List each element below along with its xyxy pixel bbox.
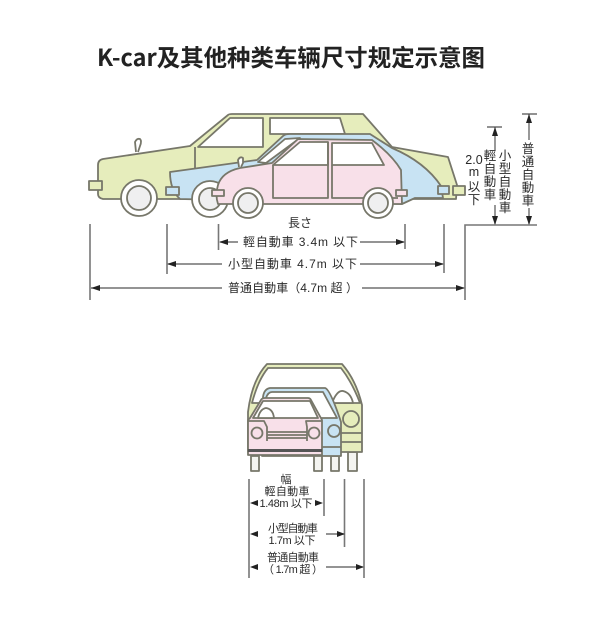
dimension: kei car width: 1.48m 以下 (260, 498, 312, 510)
dimension: kei car height: 動 (484, 175, 496, 189)
dimension: standard car height: 通 (522, 155, 535, 169)
dimension: standard car height (522, 114, 537, 225)
car: small pink side view (212, 139, 407, 218)
label: length: 長さ (288, 216, 312, 230)
dimension: kei car width: 幅 (280, 473, 292, 486)
dimension: small car width: 1.7m 以下 (268, 535, 316, 547)
title: K-car及其他种类车辆尺寸规定示意图 (97, 39, 485, 73)
dimension: standard car width: 普通自動車 (267, 550, 319, 564)
dimension: small car height: 型 (499, 162, 511, 176)
dimension: small car length (167, 257, 444, 271)
car: medium blue side view (166, 134, 449, 217)
side view cars (89, 114, 465, 218)
front view cars (248, 364, 362, 471)
dimension: standard car height: 自 (522, 168, 534, 182)
dimension: small car height: 自 (499, 175, 511, 189)
dimension: small car height: 小 (499, 149, 512, 163)
dimension: standard car length: 普通自動車（4.7m 超 ） (228, 280, 358, 295)
car: medium blue front view (262, 388, 341, 471)
dimension: kei car width: 輕自動車 (264, 484, 310, 498)
width dimensions (249, 473, 364, 578)
dimension: standard car width: （ 1.7m 超 ） (263, 562, 323, 576)
dimension: kei car height: 2.0 (465, 153, 483, 167)
dimension: kei car height: 車 (484, 188, 496, 202)
car: large green front view (248, 364, 362, 471)
dimension: kei car height: 以 (468, 180, 481, 194)
dimension: kei car width (250, 473, 323, 510)
dimension: small car length: 小型自動車 4.7m 以下 (228, 257, 357, 271)
dimension: kei car height: 輕 (484, 149, 497, 163)
dimension: small car height: 動 (499, 188, 511, 202)
length dimensions (90, 216, 537, 300)
dimension: kei car height (465, 127, 502, 225)
dimension: kei car height: 自 (484, 162, 496, 176)
dimension: kei car height: m (469, 165, 479, 179)
dimension: standard car height: 普 (522, 142, 534, 156)
dimension: standard car height: 車 (522, 194, 534, 208)
height dimensions (465, 114, 537, 225)
dimension: small car height: 車 (499, 201, 511, 215)
dimension: small car width (250, 521, 345, 547)
car: large green side view (89, 114, 465, 216)
dimension: small car width: 小型自動車 (268, 521, 318, 535)
dimension: kei car length: 輕自動車 3.4m 以下 (243, 235, 358, 249)
dimension: kei car height: 下 (468, 193, 480, 207)
dimension: standard car width (250, 550, 364, 576)
dimension: kei car length (219, 235, 405, 249)
car: small pink front view (248, 398, 322, 471)
dimension: standard car length (91, 280, 465, 295)
dimension: standard car height: 動 (522, 181, 534, 195)
